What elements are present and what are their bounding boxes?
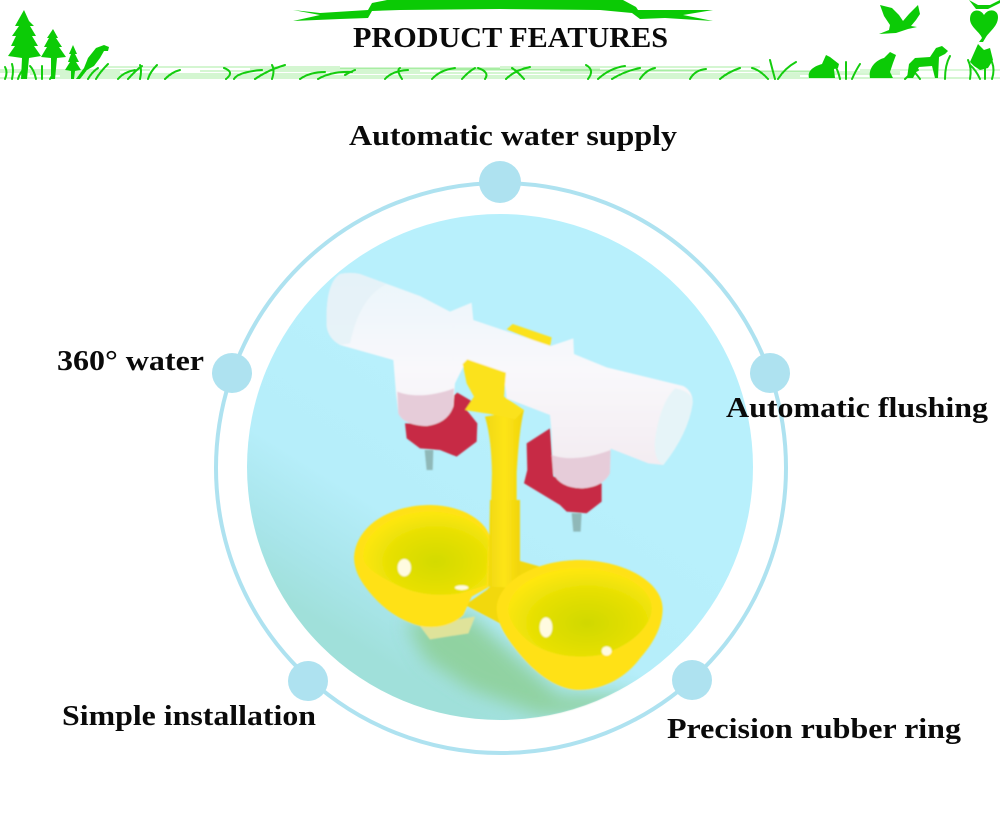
white tube [326,273,693,488]
yellow stem [485,410,524,540]
label: 360 water: 360° water [57,345,204,377]
pink water tint right [552,450,611,488]
icon: squirrel [870,52,896,78]
product photo: drinker [326,273,693,716]
pipe left end tint [326,273,387,345]
back arm [465,560,540,623]
label: automatic flushing: Automatic flushing [726,392,989,424]
pink water tint left [397,388,454,426]
pin left [425,450,433,470]
pin right [572,513,582,532]
red clip right [524,428,602,513]
icon: dove [879,5,920,34]
title: PRODUCT FEATURES [353,23,668,54]
right bowl inner [508,568,652,657]
icon: parrot [76,45,109,79]
light blue disc [247,214,753,720]
label: simple installation: Simple installation [62,700,316,732]
yellow bracket [463,359,524,419]
icon: dog [907,46,948,78]
header banner [0,0,1000,79]
label: precision rubber ring: Precision rubber ring [667,713,962,745]
node: top [479,161,521,203]
icon: trees [8,10,81,79]
highlights [398,559,612,656]
grass band [0,67,1000,78]
underside base [420,617,475,639]
node: left [212,353,252,393]
node: lower left [288,661,328,701]
stem column [488,500,520,587]
right bowl [497,560,663,690]
left bowl [354,505,490,627]
node: lower right [672,660,712,700]
shadow [405,615,640,716]
far bracket tab [507,324,552,347]
node: right [750,353,790,393]
left bowl inner [363,512,488,595]
red clip left [405,393,477,457]
label: automatic water supply: Automatic water supply [349,120,678,152]
pipe end opening [655,388,693,465]
bowls [354,500,663,690]
ribbon [293,0,713,21]
outer ring [216,183,786,753]
icon: heart plant [969,0,1000,42]
icon: bush [970,44,993,70]
grass blades [5,56,994,79]
icon: rabbit [809,55,839,78]
